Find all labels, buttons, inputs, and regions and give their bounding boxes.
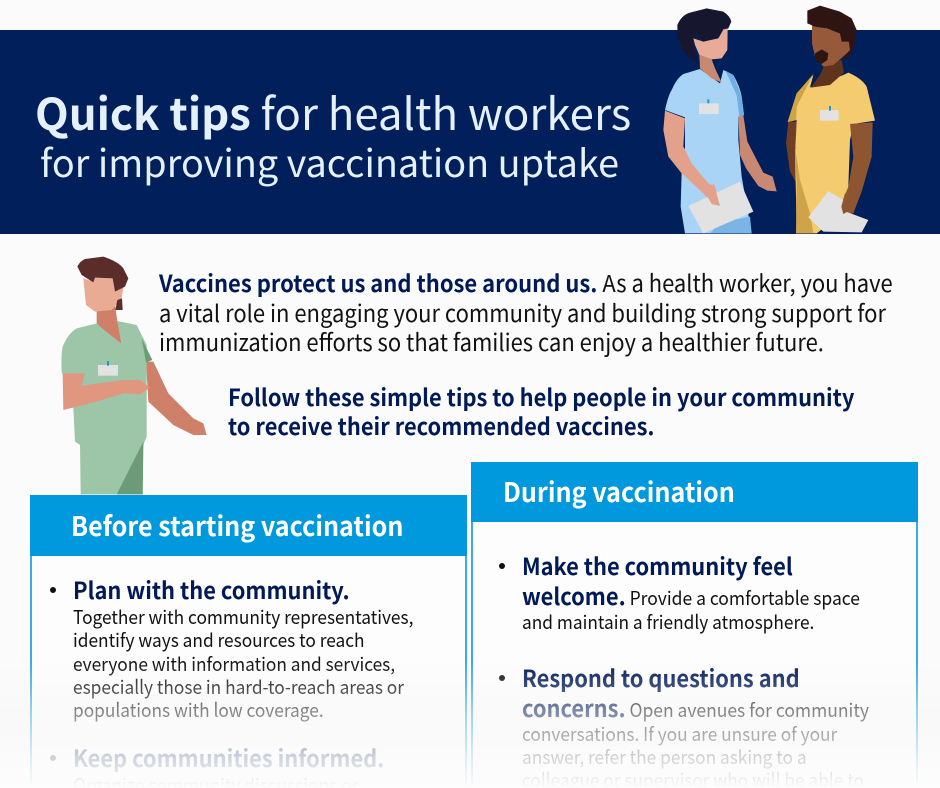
panel outline (30, 495, 467, 788)
tip body: populations with low coverage. (73, 696, 324, 723)
panel heading (471, 462, 918, 522)
heading text: During vaccination (503, 471, 735, 510)
tip body (73, 603, 413, 723)
panel outline (471, 462, 918, 788)
illustration: two health workers (663, 6, 875, 234)
tip body: identify ways and resources to reach (73, 626, 365, 653)
panel: before starting vaccination (30, 495, 467, 788)
bullet (50, 587, 56, 593)
bullet (499, 675, 505, 681)
title line 1: Quick tips for health workers (35, 79, 631, 143)
call to action (228, 379, 854, 442)
title (35, 79, 631, 188)
tip heading and body: answer, refer the person asking to a (522, 743, 807, 770)
intro paragraph: a vital role in engaging your community and building strong support for (159, 295, 886, 329)
bullet (50, 755, 56, 761)
heading text: Before starting vaccination (71, 505, 403, 544)
tip heading and body: Respond to questions and (522, 660, 800, 694)
tip body: Together with community representatives, (73, 603, 413, 630)
header banner (0, 30, 940, 234)
tip heading and body: Make the community feel (522, 548, 793, 582)
tip heading and body (522, 548, 860, 635)
intro paragraph: Vaccines protect us and those around us. As a health worker, you have (159, 265, 893, 299)
bullet (499, 563, 505, 569)
male health worker (786, 6, 875, 233)
illustration: health worker in green scrubs (61, 256, 207, 494)
intro paragraph (158, 265, 893, 358)
tip body: especially those in hard-to-reach areas or (73, 673, 404, 700)
call to action: Follow these simple tips to help people in your community (228, 379, 854, 413)
panel heading (30, 495, 467, 556)
tip heading and body: concerns. Open avenues for community (522, 690, 869, 724)
intro paragraph: immunization efforts so that families can enjoy a healthier future. (159, 324, 824, 358)
tip heading and body (522, 660, 869, 788)
panel: during vaccination (471, 462, 918, 788)
title line 2: for improving vaccination uptake (40, 133, 619, 188)
female health worker (663, 8, 777, 233)
tip heading and body: welcome. Provide a comfortable space (522, 578, 860, 612)
tip heading and body: and maintain a friendly atmosphere. (522, 608, 814, 635)
bottom fade (0, 660, 940, 788)
tip heading and body: conversations. If you are unsure of your (522, 720, 837, 747)
call to action: to receive their recommended vaccines. (228, 408, 655, 442)
tip body: everyone with information and services, (73, 650, 395, 677)
tip heading: Plan with the community. (73, 572, 350, 606)
tip heading: Keep communities informed. (73, 740, 384, 774)
